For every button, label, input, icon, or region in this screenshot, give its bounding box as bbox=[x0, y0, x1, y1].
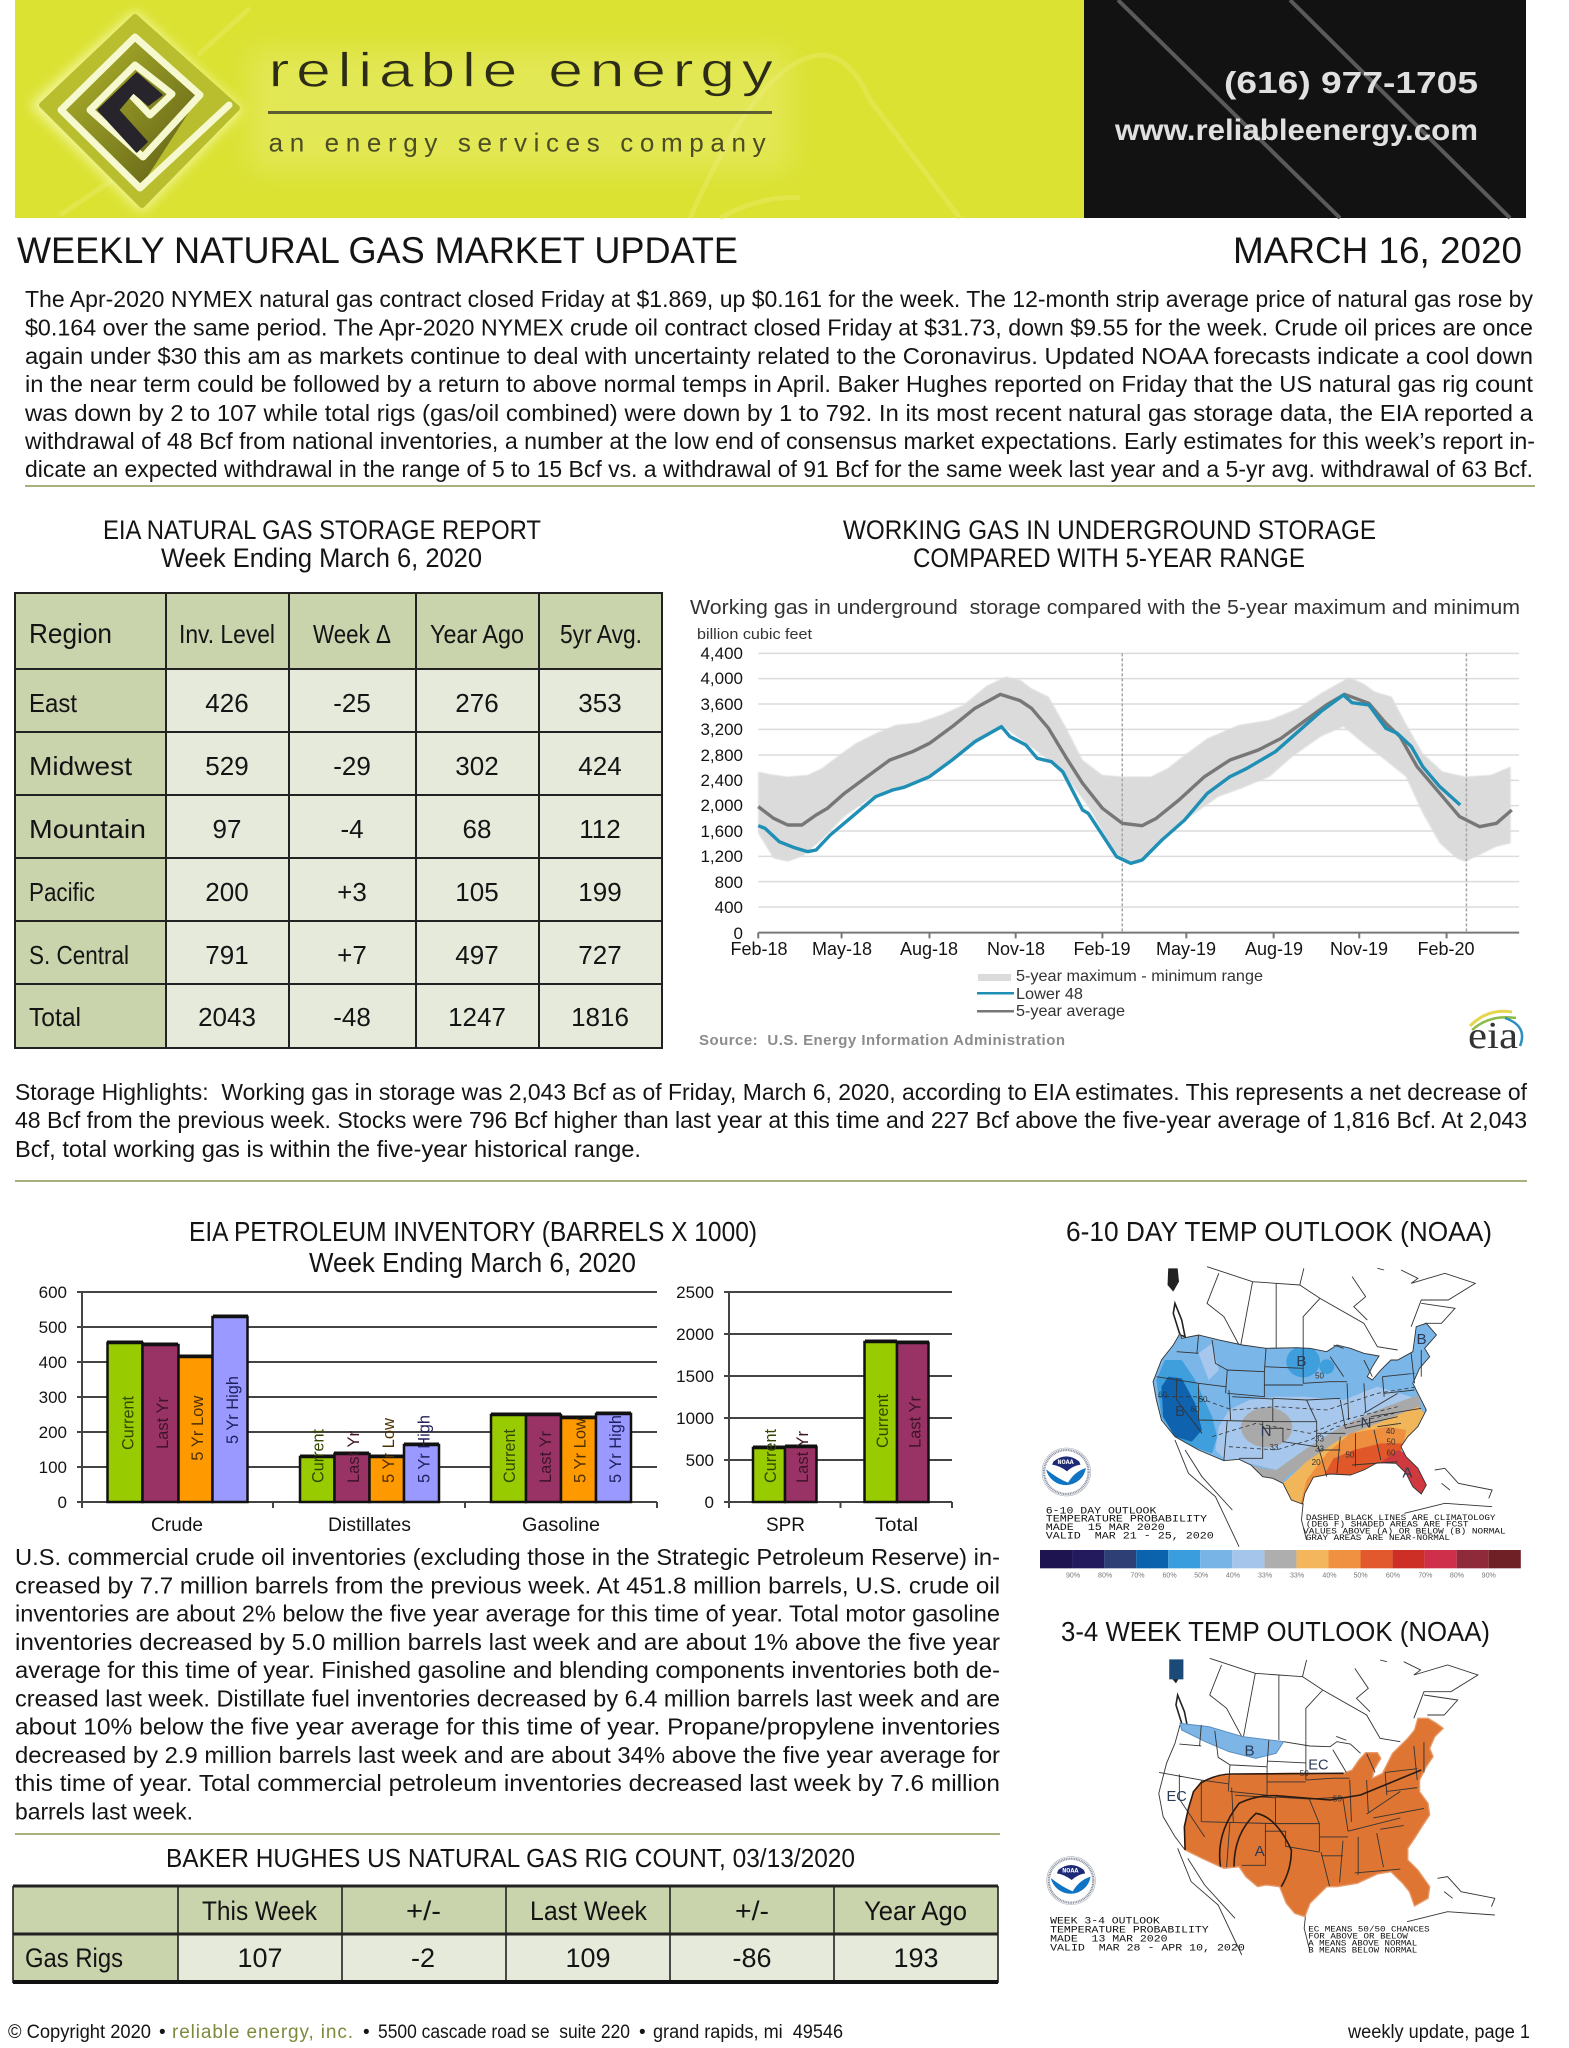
row: Total bbox=[29, 1002, 629, 1032]
map letters and contour values: 55 bbox=[1333, 1794, 1342, 1803]
y axis labels: 1500 bbox=[676, 1367, 714, 1386]
probability colour scale: 40% bbox=[1226, 1573, 1240, 1580]
table header row: Week Δ bbox=[313, 619, 391, 649]
heading: EIA storage report: EIA NATURAL GAS STORAGE REPORT bbox=[103, 515, 541, 545]
footer left: reliable energy, inc. bbox=[172, 2022, 353, 2043]
petroleum paragraph: about 10% below the five year average for this time of year. Propane/propylene inventories bbox=[15, 1714, 1000, 1740]
intro paragraph: was down by 2 to 107 while total rigs (gas/oil combined) were down by 1 to 792. In its most recent natural gas storage data, the EIA reported a bbox=[24, 400, 1534, 426]
heading: petroleum inventory bbox=[189, 1216, 757, 1278]
map letters and contour values: 50 bbox=[1300, 1769, 1309, 1778]
bars: crude: Last Yr bbox=[154, 1397, 172, 1449]
row: Total: -48 bbox=[333, 1002, 371, 1032]
heading: rig count: BAKER HUGHES US NATURAL GAS RIG COUNT, 03/13/2020 bbox=[166, 1843, 855, 1873]
bars: total: Current bbox=[874, 1394, 892, 1448]
map caption left: TEMPERATURE PROBABILITY bbox=[1050, 1926, 1209, 1937]
y axis labels: 2000 bbox=[676, 1325, 714, 1344]
footer left: 5500 cascade road se suite 220 bbox=[378, 2022, 630, 2043]
map caption left: VALID MAR 28 - APR 10, 2020 bbox=[1050, 1944, 1245, 1955]
map letters and contour values: A bbox=[1255, 1843, 1266, 1860]
bars: gasoline: Current bbox=[501, 1429, 519, 1483]
x axis labels bbox=[766, 1515, 918, 1536]
probability colour scale: 33% bbox=[1258, 1573, 1272, 1580]
probability colour scale: 70% bbox=[1130, 1573, 1145, 1580]
map letters and contour values: 50 bbox=[1387, 1438, 1396, 1447]
intro paragraph: in the near term could be followed by a return to above normal temps in April. Baker Hughes reported on Friday that the US natural gas rig count bbox=[25, 371, 1533, 397]
x axis labels: Total bbox=[875, 1515, 918, 1536]
map: 6-10 day temperature outlook bbox=[1040, 1267, 1521, 1580]
bars: gasoline: 5 Yr Low bbox=[572, 1418, 590, 1483]
y axis labels: 800 bbox=[715, 873, 743, 892]
row: Mountain: 97 bbox=[213, 814, 241, 844]
probability colour scale: 80% bbox=[1450, 1573, 1464, 1580]
y axis labels: 0 bbox=[705, 1493, 714, 1512]
intro paragraph: $0.164 over the same period. The Apr-2020 NYMEX crude oil contract closed Friday at $31.73, down $9.55 for the week. Crude oil prices are once bbox=[25, 314, 1533, 340]
row: S. Central: 791 bbox=[205, 940, 249, 970]
heading: 6-10 day outlook: 6-10 DAY TEMP OUTLOOK (NOAA) bbox=[1066, 1216, 1492, 1247]
table header row bbox=[29, 618, 642, 649]
x axis labels: SPR bbox=[766, 1515, 805, 1536]
map letters and contour values: 40 bbox=[1386, 1427, 1395, 1436]
probability contours bbox=[1169, 1659, 1421, 1887]
map letters and contour values: 50 bbox=[1199, 1395, 1208, 1404]
y axis labels: 3,600 bbox=[700, 695, 743, 714]
logo rule bbox=[268, 111, 772, 114]
intro paragraph: dicate an expected withdrawal in the range of 5 to 15 Bcf vs. a withdrawal of 91 Bcf for the same week last year and a 5-yr avg. withdrawal of 63 Bcf. bbox=[25, 456, 1533, 482]
footer left: • bbox=[363, 2022, 370, 2043]
y axis labels bbox=[676, 1283, 714, 1512]
table header row: Year Ago bbox=[430, 619, 524, 649]
rig table row: gas rigs: -86 bbox=[732, 1943, 772, 1973]
map letters and contour values: 50 bbox=[1345, 1450, 1355, 1459]
y axis labels: 3,200 bbox=[700, 720, 743, 739]
table header row: Region bbox=[29, 618, 112, 649]
petroleum paragraph: this time of year. Total commercial petroleum inventories decreased last week by 7.6 million bbox=[15, 1770, 1000, 1796]
storage highlights text bbox=[15, 1079, 1527, 1162]
x axis labels bbox=[730, 939, 1475, 959]
map letters and contour values: 20 bbox=[1312, 1458, 1321, 1467]
y axis labels: 0 bbox=[58, 1493, 67, 1512]
NOAA logo text: NOAA bbox=[1062, 1868, 1079, 1876]
row: East: East bbox=[29, 688, 78, 718]
row: Pacific: 105 bbox=[455, 877, 499, 907]
row: S. Central: S. Central bbox=[29, 940, 129, 970]
bars: distillates: Current bbox=[309, 1429, 327, 1483]
storage highlights text: Storage Highlights: Working gas in storage was 2,043 Bcf as of Friday, March 6, 2020, according to EIA estimates. This represents a net decrease of bbox=[15, 1079, 1527, 1105]
legend: 5-year average bbox=[1016, 1003, 1125, 1020]
probability colour scale: 60% bbox=[1162, 1573, 1177, 1580]
map letters and contour values bbox=[1167, 1742, 1342, 1860]
bars: SPR: Current bbox=[762, 1429, 780, 1483]
map letters and contour values: B bbox=[1175, 1403, 1185, 1420]
map caption right: DASHED BLACK LINES ARE CLIMATOLOGY bbox=[1306, 1513, 1495, 1523]
y axis labels: 300 bbox=[39, 1388, 67, 1407]
x axis labels: Feb-18 bbox=[730, 939, 788, 959]
NOAA logo text: NOAA bbox=[1058, 1459, 1075, 1467]
x axis labels: Feb-19 bbox=[1073, 939, 1131, 959]
footer right: weekly update, page 1 bbox=[1347, 2022, 1530, 2043]
row: S. Central: +7 bbox=[337, 940, 367, 970]
y axis labels: 4,000 bbox=[700, 669, 743, 688]
map letters and contour values: 33 bbox=[1315, 1435, 1325, 1444]
row: Midwest: 424 bbox=[578, 751, 622, 781]
heading: working gas chart: WORKING GAS IN UNDERGROUND STORAGE bbox=[843, 515, 1376, 545]
petroleum paragraph: average for this time of year. Finished gasoline and blending components inventories both de- bbox=[15, 1657, 1000, 1683]
footer left: • bbox=[159, 2022, 166, 2043]
date: MARCH 16, 2020 bbox=[1233, 230, 1522, 271]
row: East: 426 bbox=[205, 688, 249, 718]
legend bbox=[977, 968, 1263, 1020]
heading: petroleum inventory: EIA PETROLEUM INVENTORY (BARRELS X 1000) bbox=[189, 1216, 757, 1247]
map letters and contour values: 50 bbox=[1315, 1371, 1325, 1380]
probability colour scale: 50% bbox=[1194, 1573, 1208, 1580]
map caption right: VALUES ABOVE (A) OR BELOW (B) NORMAL bbox=[1303, 1526, 1506, 1536]
map caption right: EC MEANS 50/50 CHANCES bbox=[1308, 1925, 1430, 1935]
petroleum paragraph: U.S. commercial crude oil inventories (excluding those in the Strategic Petroleum Reserve) in- bbox=[15, 1544, 1000, 1570]
y axis labels: 2,800 bbox=[700, 746, 743, 765]
probability colour scale bbox=[1040, 1550, 1521, 1580]
row: Midwest: 302 bbox=[455, 751, 499, 781]
phone number: (616) 977-1705 bbox=[1224, 65, 1478, 100]
petroleum paragraph: barrels last week. bbox=[15, 1798, 193, 1824]
y axis labels: 0 bbox=[734, 924, 743, 943]
icon: NOAA logo bbox=[1047, 1857, 1095, 1905]
row: Mountain: Mountain bbox=[29, 814, 146, 844]
shaded probability regions bbox=[1154, 1324, 1436, 1504]
row: Pacific: 199 bbox=[578, 877, 622, 907]
probability colour scale: 60% bbox=[1386, 1573, 1400, 1580]
rig table row: gas rigs: Gas Rigs bbox=[25, 1943, 123, 1973]
chart: petroleum inventory (crude, distillates, gasoline) bbox=[39, 1283, 657, 1536]
bars: SPR: Last Yr bbox=[794, 1431, 812, 1483]
map caption right: A MEANS ABOVE NORMAL bbox=[1308, 1939, 1417, 1949]
row: Total: Total bbox=[29, 1002, 81, 1032]
bars: distillates: 5 Yr High bbox=[415, 1415, 433, 1483]
probability colour scale: 40% bbox=[1322, 1573, 1337, 1580]
icon: NOAA logo bbox=[1042, 1448, 1091, 1496]
rig table header: Year Ago bbox=[864, 1896, 967, 1926]
map caption right: FOR ABOVE OR BELOW bbox=[1308, 1931, 1409, 1941]
rig table header: +/- bbox=[735, 1896, 769, 1926]
row: East: -25 bbox=[333, 688, 371, 718]
bars: gasoline bbox=[491, 1413, 631, 1502]
blue below-normal region bbox=[1180, 1723, 1284, 1758]
row: S. Central: 727 bbox=[578, 940, 622, 970]
row: Pacific bbox=[29, 877, 622, 907]
y unit label: billion cubic feet bbox=[697, 626, 813, 643]
x axis labels: Feb-20 bbox=[1417, 939, 1475, 959]
heading: working gas chart: COMPARED WITH 5-YEAR RANGE bbox=[913, 543, 1305, 573]
map caption right bbox=[1303, 1513, 1506, 1543]
row: S. Central: 497 bbox=[455, 940, 499, 970]
rig table row: gas rigs bbox=[25, 1943, 939, 1973]
map caption left: MADE 15 MAR 2020 bbox=[1046, 1523, 1165, 1534]
state borders bbox=[1156, 1335, 1421, 1477]
map caption left: WEEK 3-4 OUTLOOK bbox=[1050, 1916, 1161, 1927]
bars: SPR bbox=[753, 1429, 817, 1502]
intro paragraph: again under $30 this am as markets continue to deal with uncertainty related to the Coronavirus. Updated NOAA forecasts indicate a cool down bbox=[25, 343, 1533, 369]
y axis labels: 1000 bbox=[676, 1409, 714, 1428]
west coast and northern border bbox=[1159, 1725, 1361, 1850]
x axis labels: Aug-18 bbox=[900, 939, 958, 959]
map caption left bbox=[1050, 1916, 1245, 1955]
probability colour scale: 70% bbox=[1418, 1573, 1432, 1580]
x axis labels: Nov-19 bbox=[1330, 939, 1388, 959]
row: East: 276 bbox=[455, 688, 499, 718]
source note: Source: U.S. Energy Information Administration bbox=[699, 1032, 1065, 1049]
chart: petroleum inventory (SPR, total) bbox=[676, 1283, 952, 1536]
map letters and contour values: A bbox=[1402, 1464, 1413, 1481]
y axis labels bbox=[700, 644, 743, 943]
x axis labels: Gasoline bbox=[522, 1515, 600, 1536]
map letters and contour values: B bbox=[1244, 1742, 1255, 1759]
map letters and contour values: N bbox=[1361, 1414, 1371, 1431]
map letters and contour values: 60 bbox=[1158, 1390, 1168, 1399]
bars: crude: Current bbox=[119, 1396, 137, 1450]
title: WEEKLY NATURAL GAS MARKET UPDATE bbox=[17, 230, 738, 271]
row: Pacific: 200 bbox=[205, 877, 249, 907]
map caption left: TEMPERATURE PROBABILITY bbox=[1046, 1515, 1207, 1526]
bars: gasoline: Last Yr bbox=[537, 1431, 555, 1483]
rig table header: This Week bbox=[202, 1896, 317, 1926]
row: Pacific: +3 bbox=[337, 877, 367, 907]
probability colour scale: 33% bbox=[1290, 1573, 1304, 1580]
bars: total bbox=[864, 1341, 929, 1502]
y axis labels: 600 bbox=[39, 1283, 67, 1302]
x axis labels: Aug-19 bbox=[1245, 939, 1303, 959]
bars: crude: 5 Yr High bbox=[224, 1376, 242, 1444]
intro paragraph bbox=[24, 286, 1535, 482]
footer left: • bbox=[639, 2022, 646, 2043]
row: Midwest: -29 bbox=[333, 751, 371, 781]
map caption left: VALID MAR 21 - 25, 2020 bbox=[1046, 1531, 1214, 1542]
table header row: 5yr Avg. bbox=[560, 619, 642, 649]
map letters and contour values: 60 bbox=[1190, 1405, 1200, 1414]
row: Midwest: 529 bbox=[205, 751, 249, 781]
heading: EIA storage report bbox=[103, 515, 541, 573]
legend: 5-year maximum - minimum range bbox=[1016, 968, 1263, 985]
heading: petroleum inventory: Week Ending March 6, 2020 bbox=[309, 1247, 636, 1278]
bars: distillates: Last Yr bbox=[345, 1431, 363, 1483]
map letters and contour values: EC bbox=[1167, 1788, 1187, 1805]
table header row: Inv. Level bbox=[179, 619, 275, 649]
heading: working gas chart bbox=[843, 515, 1376, 573]
petroleum paragraph: creased by 7.7 million barrels from the previous week. At 451.8 million barrels, U.S. crude oil bbox=[15, 1572, 1000, 1598]
rig table row: gas rigs: 193 bbox=[893, 1943, 939, 1973]
x axis labels: May-19 bbox=[1156, 939, 1216, 959]
storage highlights text: 48 Bcf from the previous week. Stocks were 796 Bcf higher than last year at this time and 227 Bcf above the five-year average of 1,816 Bcf. At 2,043 bbox=[15, 1107, 1527, 1133]
row: Mountain: 68 bbox=[463, 814, 491, 844]
logo tagline: an energy services company bbox=[269, 128, 766, 158]
rig table row: gas rigs: 109 bbox=[565, 1943, 611, 1973]
icon: eia logo: eia bbox=[1468, 1015, 1518, 1057]
map caption right bbox=[1308, 1925, 1430, 1956]
bars: crude: 5 Yr Low bbox=[189, 1396, 207, 1461]
row: Pacific: Pacific bbox=[29, 877, 95, 907]
y axis labels: 200 bbox=[39, 1423, 67, 1442]
bars: distillates bbox=[300, 1415, 439, 1502]
bars: distillates: 5 Yr Low bbox=[380, 1418, 398, 1483]
footer left: grand rapids, mi 49546 bbox=[653, 2022, 843, 2043]
panel: storage table bbox=[15, 593, 662, 1048]
petroleum paragraph: decreased by 2.9 million barrels last week and are about 34% above the five year average for bbox=[15, 1742, 1000, 1768]
y axis labels bbox=[39, 1283, 67, 1512]
logo wordmark: reliable energy bbox=[269, 44, 773, 97]
y axis labels: 400 bbox=[39, 1353, 67, 1372]
y axis labels: 4,400 bbox=[700, 644, 743, 663]
probability colour scale: 50% bbox=[1353, 1573, 1368, 1580]
y axis labels: 2500 bbox=[676, 1283, 714, 1302]
y axis labels: 1,200 bbox=[700, 847, 743, 866]
y axis labels: 2,400 bbox=[700, 771, 743, 790]
map letters and contour values: B bbox=[1417, 1331, 1427, 1348]
rig table header bbox=[202, 1896, 967, 1926]
state borders bbox=[1159, 1725, 1424, 1886]
storage highlights text: Bcf, total working gas is within the five-year historical range. bbox=[15, 1136, 641, 1162]
map: 3-4 week temperature outlook bbox=[1047, 1658, 1495, 1956]
map letters and contour values: 60 bbox=[1387, 1448, 1396, 1457]
row: S. Central bbox=[29, 940, 622, 970]
x axis labels: May-18 bbox=[812, 939, 872, 959]
map letters and contour values: 33 bbox=[1315, 1445, 1325, 1454]
x axis labels bbox=[151, 1515, 600, 1536]
intro paragraph: withdrawal of 48 Bcf from national inventories, a number at the low end of consensus market expectations. Early estimates for this week’s report in- bbox=[24, 428, 1535, 454]
y axis labels: 100 bbox=[39, 1458, 67, 1477]
x axis labels: Nov-18 bbox=[987, 939, 1045, 959]
map caption left: 6-10 DAY OUTLOOK bbox=[1046, 1506, 1158, 1517]
website: www.reliableenergy.com bbox=[1114, 114, 1478, 147]
row: Total: 1816 bbox=[571, 1002, 629, 1032]
banner black field bbox=[1084, 0, 1526, 218]
icon: reliable energy logo diamond bbox=[30, 11, 242, 212]
bars: crude bbox=[107, 1316, 248, 1502]
row: Mountain: 112 bbox=[579, 814, 621, 844]
header banner bbox=[15, 0, 1526, 218]
rig table row: gas rigs: 107 bbox=[237, 1943, 283, 1973]
row: East: 353 bbox=[578, 688, 622, 718]
map letters and contour values: B bbox=[1296, 1353, 1307, 1370]
petroleum paragraph: creased last week. Distillate fuel inventories decreased by 6.4 million barrels last week and are bbox=[15, 1686, 1000, 1712]
probability colour scale: 90% bbox=[1482, 1573, 1496, 1580]
map caption left: MADE 13 MAR 2020 bbox=[1050, 1935, 1168, 1946]
y axis labels: 2,000 bbox=[700, 796, 743, 815]
heading: 3-4 week outlook: 3-4 WEEK TEMP OUTLOOK (NOAA) bbox=[1061, 1616, 1490, 1647]
bars: total: Last Yr bbox=[907, 1396, 925, 1448]
probability colour scale: 80% bbox=[1098, 1573, 1112, 1580]
plot lines and band bbox=[758, 653, 1519, 938]
petroleum paragraph bbox=[15, 1544, 1000, 1824]
heading: EIA storage report: Week Ending March 6, 2020 bbox=[161, 543, 482, 573]
map caption right: (DEG F) SHADED AREAS ARE FCST bbox=[1306, 1520, 1468, 1530]
y axis labels: 500 bbox=[39, 1318, 67, 1337]
map letters and contour values bbox=[1158, 1331, 1427, 1481]
row: Midwest bbox=[29, 751, 622, 781]
footer left bbox=[8, 2022, 843, 2043]
bars: gasoline: 5 Yr High bbox=[607, 1415, 625, 1483]
chart title: Working gas in underground storage compared with the 5-year maximum and minimum bbox=[690, 597, 1520, 619]
rig table header: +/- bbox=[406, 1896, 441, 1926]
footer left: © Copyright 2020 bbox=[8, 2022, 151, 2043]
y axis labels: 1,600 bbox=[700, 822, 743, 841]
rig table header: Last Week bbox=[530, 1896, 647, 1926]
probability colour scale: 90% bbox=[1066, 1573, 1080, 1580]
row: Total: 2043 bbox=[198, 1002, 256, 1032]
row: Mountain: -4 bbox=[340, 814, 364, 844]
petroleum paragraph: inventories decreased by 5.0 million barrels last week and are about 1% above the five year bbox=[15, 1629, 1000, 1655]
legend: Lower 48 bbox=[1016, 986, 1083, 1003]
intro paragraph: The Apr-2020 NYMEX natural gas contract closed Friday at $1.869, up $0.161 for the week. The 12-month strip average price of natural gas rose by bbox=[25, 286, 1533, 312]
y axis labels: 400 bbox=[715, 898, 743, 917]
x axis labels: Distillates bbox=[328, 1515, 411, 1536]
row: Total: 1247 bbox=[448, 1002, 506, 1032]
chart: working gas in underground storage bbox=[690, 597, 1522, 1057]
y axis labels: 500 bbox=[686, 1451, 714, 1470]
map letters and contour values: 33 bbox=[1269, 1443, 1279, 1452]
x axis labels: Crude bbox=[151, 1515, 203, 1536]
banner yellow field bbox=[15, 0, 1084, 218]
rig table row: gas rigs: -2 bbox=[411, 1943, 435, 1973]
map caption right: GRAY AREAS ARE NEAR-NORMAL bbox=[1306, 1533, 1450, 1543]
orange above-normal region bbox=[1184, 1718, 1443, 1917]
row: Mountain bbox=[29, 814, 621, 844]
map letters and contour values: N bbox=[1261, 1423, 1272, 1440]
petroleum paragraph: inventories are about 2% below the five year average for this time of year. Total motor gasoline bbox=[15, 1601, 1000, 1627]
map letters and contour values: EC bbox=[1308, 1756, 1329, 1773]
panel: rig count table bbox=[13, 1886, 998, 1983]
map caption left bbox=[1046, 1506, 1214, 1542]
row: Midwest: Midwest bbox=[29, 751, 133, 781]
row: East bbox=[29, 688, 622, 718]
map caption right: B MEANS BELOW NORMAL bbox=[1308, 1946, 1417, 1956]
